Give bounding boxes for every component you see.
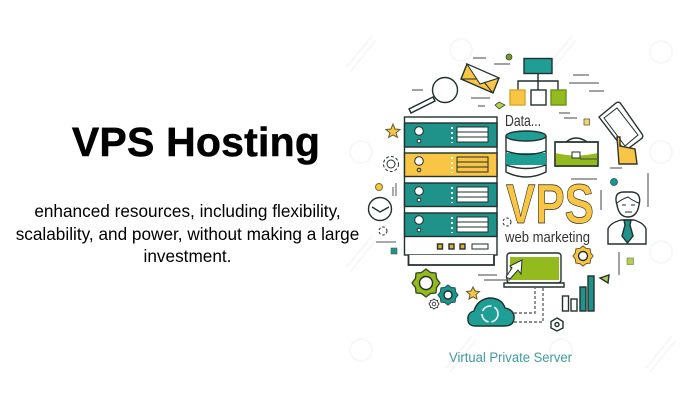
icon: envelope [461, 64, 499, 93]
icon: small yellow gear [573, 246, 593, 266]
description text: investment. [144, 246, 231, 266]
decorative small markers [376, 54, 648, 280]
icon: businessman [608, 192, 646, 244]
icon: hex nut [551, 318, 563, 331]
label: web marketing: web marketing [504, 229, 590, 246]
label: Data: Data... [505, 113, 541, 130]
icon: triangle marker [600, 275, 609, 283]
icon: network hierarchy [510, 58, 566, 105]
description text: scalability, and power, without making a large [16, 224, 359, 244]
caption: Virtual Private Server: Virtual Private Server [449, 350, 572, 365]
icon: database [506, 131, 546, 177]
icon: large green gear [412, 269, 440, 297]
heading: VPS: VPS [506, 172, 594, 235]
watermark stamps [346, 36, 676, 372]
title: VPS Hosting [72, 119, 320, 165]
icon: smartphone with hand [599, 102, 643, 164]
icon: star bottom [466, 287, 480, 299]
icon: clock [368, 198, 392, 220]
icon: dotted target [384, 156, 398, 172]
server rack [404, 117, 497, 265]
icon: magnifying glass [409, 78, 458, 113]
icon: briefcase [555, 138, 598, 166]
icon: teal gear [438, 285, 458, 305]
icon: cloud sync [468, 287, 543, 326]
description text [16, 201, 359, 266]
icon: bar chart [562, 276, 594, 311]
icon: star top left [386, 124, 400, 138]
icon: small outline gear [429, 299, 439, 309]
description text: enhanced resources, including flexibility, [34, 201, 341, 221]
icon: laptop with cursor [504, 253, 564, 287]
